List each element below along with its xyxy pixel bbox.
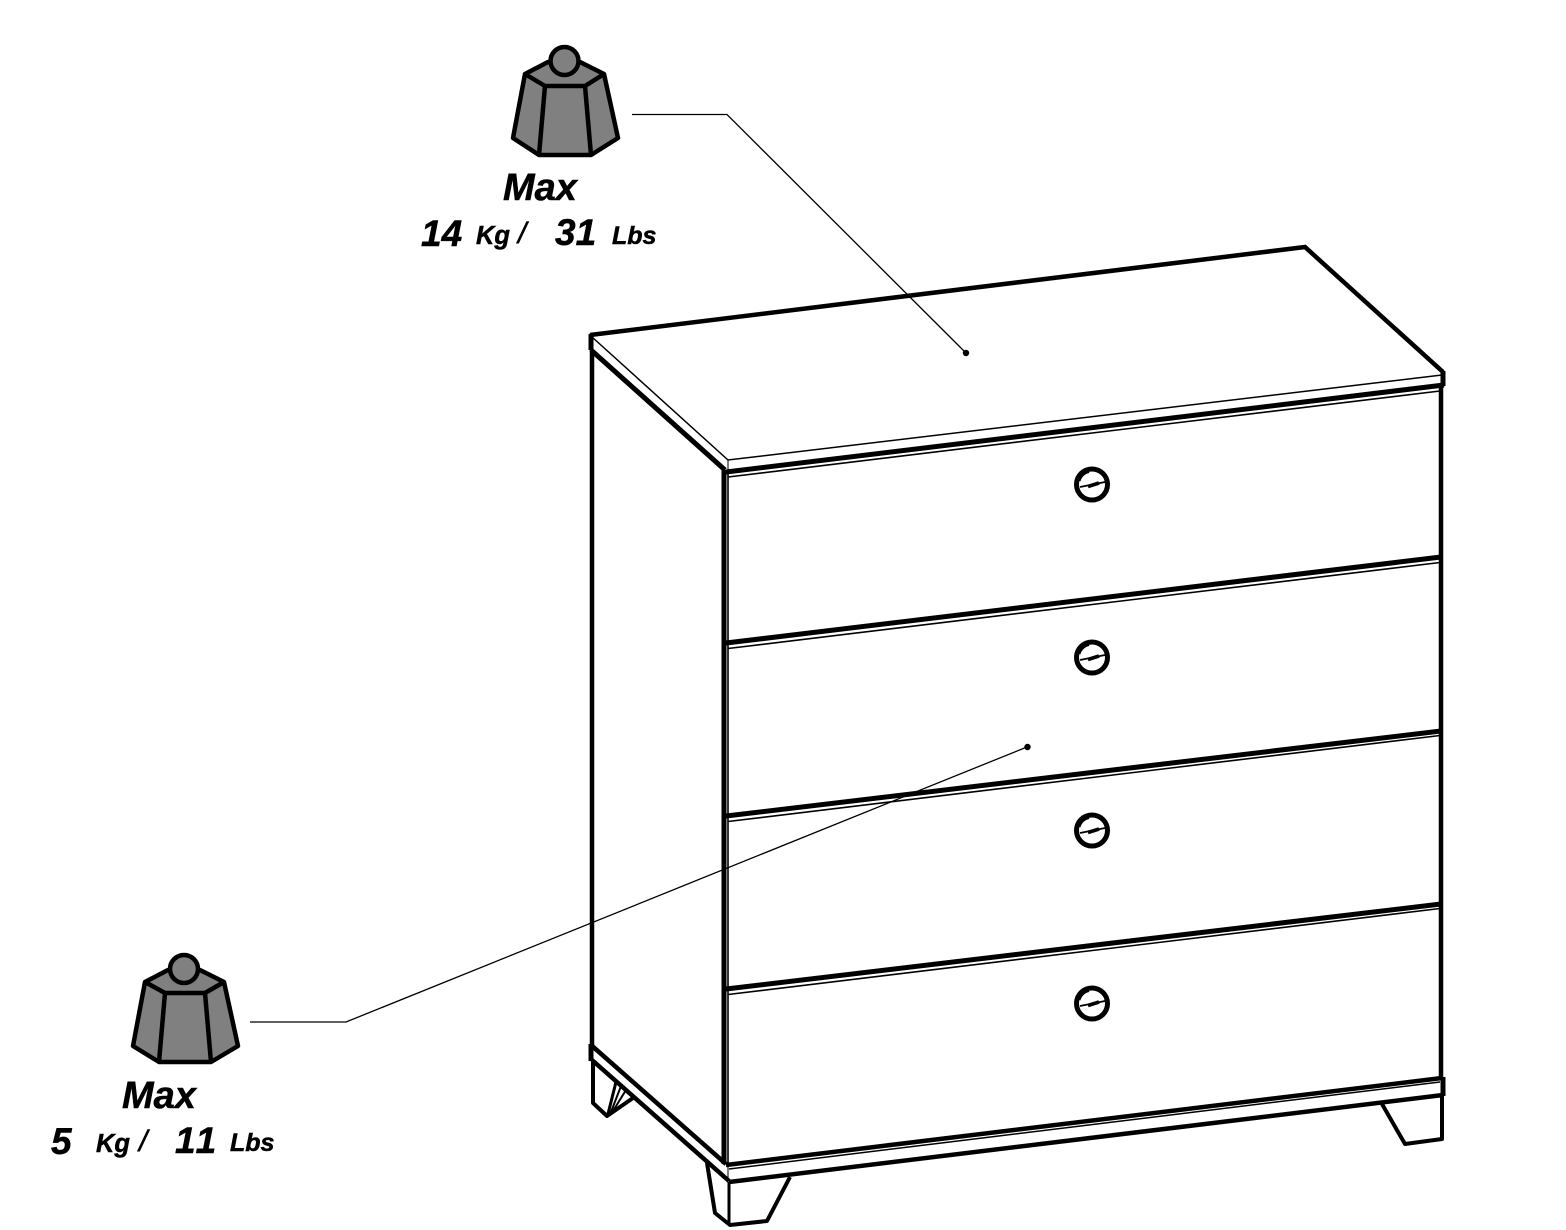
label: top surface limit: Kg	[476, 222, 510, 250]
top panel	[590, 247, 1444, 472]
label: drawer limit: Max	[122, 1075, 198, 1117]
carcass sides	[592, 350, 1441, 1164]
back foot	[593, 1060, 633, 1116]
label: drawer limit: Kg	[96, 1130, 130, 1158]
label: top surface limit: Lbs	[612, 222, 657, 250]
icon: weight, drawer	[133, 955, 238, 1062]
plinth base	[591, 1044, 1443, 1182]
leader line: drawer	[250, 744, 1031, 1022]
label: drawer limit: 11	[175, 1120, 216, 1161]
right foot	[1382, 1095, 1442, 1144]
front foot	[707, 1163, 790, 1225]
drawer knob 4	[1076, 988, 1108, 1019]
label: top surface limit: Max	[503, 167, 579, 209]
drawer knob 2	[1076, 642, 1108, 673]
label: drawer limit: /	[137, 1125, 150, 1158]
label: top surface limit	[421, 167, 657, 254]
leader line: top surface	[632, 114, 969, 356]
label: drawer limit: 5	[51, 1121, 73, 1162]
icon: weight, top surface	[513, 47, 618, 155]
label: drawer limit	[51, 1075, 275, 1162]
label: top surface limit: /	[516, 217, 529, 250]
drawer fronts	[726, 391, 1441, 994]
label: drawer limit: Lbs	[230, 1129, 275, 1157]
chest of drawers	[590, 247, 1444, 1225]
drawer knob 1	[1076, 469, 1108, 500]
label: top surface limit: 31	[555, 212, 596, 253]
drawer knob 3	[1076, 815, 1108, 846]
label: top surface limit: 14	[421, 213, 462, 254]
